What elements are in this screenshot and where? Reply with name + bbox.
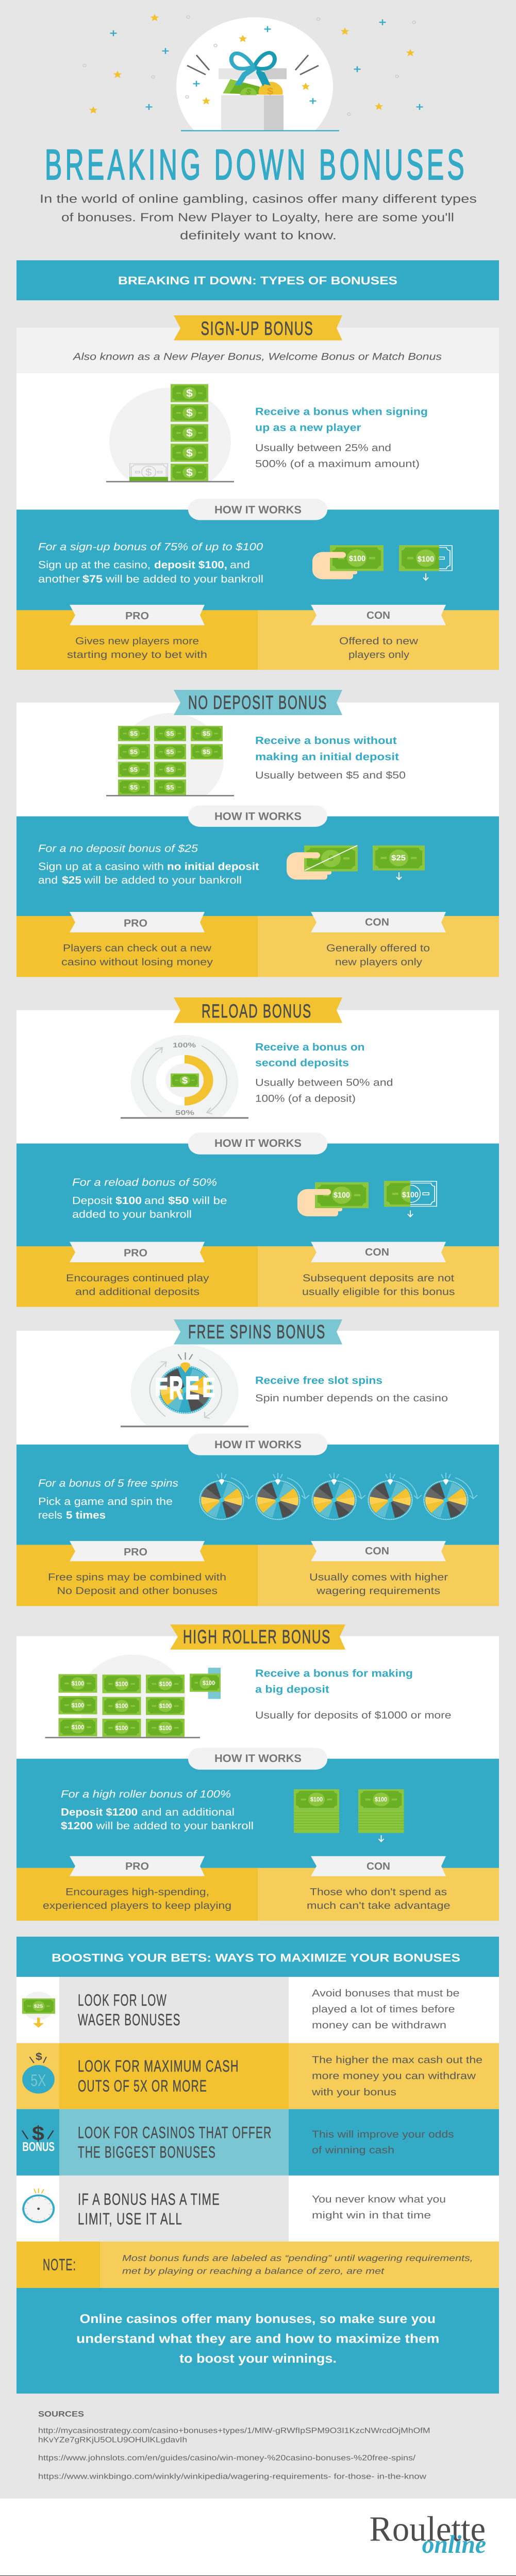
logo: roulette online: online	[422, 2531, 486, 2558]
pro: PRO	[124, 917, 147, 929]
tip row: low wager	[16, 1977, 499, 2043]
illustration: stack of bills: $	[145, 466, 152, 478]
pro: Free spins may be combined with	[48, 1571, 226, 1583]
illustration: bills going into slot: $100	[159, 1702, 172, 1709]
tip detail	[312, 2128, 454, 2156]
how it works text: another	[38, 573, 80, 585]
illustration: grid of five dollar bills: $5	[203, 748, 210, 755]
gold coin	[259, 82, 282, 97]
con: CON	[367, 609, 390, 621]
description: making an initial deposit	[255, 751, 399, 762]
how it works pill: HOW IT WORKS	[214, 1138, 302, 1149]
illustration: reload gauge: 100%	[173, 1042, 196, 1049]
description: second deposits	[255, 1057, 349, 1069]
how it works text: and	[144, 1194, 164, 1206]
pro: Encourages continued play	[66, 1273, 209, 1284]
description	[255, 1374, 448, 1403]
con: Subsequent deposits are not	[303, 1273, 454, 1284]
con: CON	[365, 1545, 389, 1557]
description: up as a new player	[255, 421, 361, 433]
pro: starting money to bet with	[67, 649, 207, 660]
pro: casino without losing money	[61, 956, 213, 968]
illustration: free spin wheel	[121, 1345, 248, 1427]
sources: https://www.winkbingo.com/winkly/winkipedia/wagering-requirements- for-those- in-the-know	[38, 2472, 427, 2481]
how it works pill: HOW IT WORKS	[214, 504, 302, 516]
icon: half bill with arrow: $100	[402, 1191, 419, 1199]
con: CON	[367, 1860, 390, 1872]
illustration: grid of five dollar bills: $5	[130, 766, 138, 773]
con: much can't take advantage	[307, 1900, 451, 1911]
tip detail: with your bonus	[311, 2086, 396, 2097]
illustration: reload gauge: $	[182, 1076, 188, 1086]
how it works text	[38, 1477, 178, 1521]
hero illustration: gift box with confetti	[83, 14, 423, 131]
con: Those who don't spend as	[310, 1886, 447, 1897]
description: Receive a bonus without	[255, 735, 397, 747]
icon: hand with bill: $100	[349, 554, 365, 563]
icon: stopwatch	[22, 2188, 55, 2223]
description: Receive a bonus for making	[255, 1667, 413, 1679]
illustration: bills going into slot: $100	[72, 1702, 84, 1709]
how it works text: will be added to your bankroll	[105, 573, 263, 585]
con: new players only	[335, 956, 422, 968]
note: met by playing or reaching a balance of zero, are met	[122, 2266, 385, 2276]
intro text: definitely want to know.	[180, 228, 337, 242]
how it works text: For a sign-up bonus of 75% of up to $100	[38, 540, 263, 552]
illustration: free spin wheel: R	[169, 1370, 183, 1405]
illustration: bills going into slot: $100	[159, 1724, 172, 1732]
how it works pill	[188, 1748, 327, 1770]
ribbon heading: reload bonus: RELOAD BONUS	[202, 1000, 312, 1022]
icon: 5X badge	[22, 2050, 55, 2094]
icon: bill sliding in with arrow	[399, 545, 453, 580]
how it works text: no initial deposit	[167, 860, 259, 872]
illustration: grid of five dollar bills: $5	[166, 766, 174, 773]
icon: 25 dollar bill with arrow: $25	[391, 854, 406, 862]
illustration: free spin wheel: E	[203, 1373, 215, 1402]
pro: PRO	[124, 1546, 147, 1557]
how it works text: For a reload bonus of 50%	[72, 1176, 217, 1188]
how it works text: and an additional	[141, 1806, 235, 1818]
illustration: stack of bills: $	[186, 407, 193, 419]
tip row: maximum cash outs: LOOK FOR MAXIMUM CASH	[78, 2057, 239, 2075]
pro: Encourages high-spending,	[65, 1886, 209, 1897]
illustration: stack of bills: $	[186, 427, 193, 438]
pro: and additional deposits	[75, 1286, 199, 1297]
cash bill in gift: $	[244, 87, 253, 97]
illustration: stack of bills: $	[186, 466, 193, 478]
tip detail: Avoid bonuses that must be	[312, 1987, 460, 1998]
description	[255, 405, 428, 469]
how it works text: $25	[62, 874, 81, 886]
pro: PRO	[124, 1247, 147, 1259]
section header: types of bonuses	[16, 260, 499, 300]
tip row: time limit	[16, 2176, 499, 2242]
icon: bonus dollar: BONUS	[22, 2140, 55, 2154]
how it works text: reels	[38, 1509, 62, 1521]
sources	[38, 2410, 430, 2481]
tip row: low wager: WAGER BONUSES	[78, 2010, 181, 2029]
tip detail: money can be withdrawn	[312, 2020, 446, 2031]
panel: reload bonus	[16, 997, 499, 1307]
pro	[48, 1541, 226, 1596]
pro: experienced players to keep playing	[43, 1900, 231, 1911]
icon: hand with bill	[297, 1182, 369, 1216]
gift box	[221, 95, 284, 130]
how it works text: $75	[82, 573, 103, 585]
con: players only	[348, 649, 409, 660]
illustration: bills going into slot	[45, 1654, 221, 1738]
how it works text: $100	[115, 1194, 142, 1206]
how it works text: Deposit $1200	[61, 1806, 138, 1818]
sources: SOURCES	[38, 2410, 84, 2418]
description: Spin number depends on the casino	[255, 1392, 448, 1403]
closing statement: to boost your winnings.	[179, 2351, 337, 2366]
closing statement: Online casinos offer many bonuses, so make sure you	[79, 2312, 436, 2326]
tip row: biggest bonuses: THE BIGGEST BONUSES	[78, 2143, 216, 2161]
how it works text	[38, 540, 263, 585]
how it works text: Sign up at the casino,	[38, 559, 151, 571]
how it works text: and	[38, 874, 58, 886]
icon: 5X badge: 5X	[30, 2071, 46, 2090]
how it works pill: HOW IT WORKS	[214, 810, 302, 823]
tip detail: You never know what you	[312, 2193, 446, 2205]
intro text: In the world of online gambling, casinos offer many different types	[40, 192, 477, 206]
tip detail: might win in that time	[312, 2209, 431, 2221]
con	[309, 1541, 448, 1596]
illustration: grid of five dollar bills: $5	[166, 784, 174, 791]
ribbon bow	[231, 53, 275, 87]
con: CON	[365, 916, 389, 928]
pro: PRO	[125, 1860, 149, 1872]
illustration: grid of five dollar bills: $5	[130, 748, 138, 755]
description: 500% (of a maximum amount)	[255, 458, 420, 469]
icon: hand with crossed-out bill	[287, 845, 358, 879]
icon: two stacks of bills: $100	[375, 1796, 387, 1803]
cash bill in gift	[223, 79, 265, 102]
illustration: stack of bills: $	[186, 447, 193, 459]
illustration: grid of five dollar bills	[106, 713, 234, 796]
subtitle: Also known as a New Player Bonus, Welcome Bonus or Match Bonus	[72, 351, 442, 362]
how it works pill	[188, 805, 327, 827]
tip detail	[312, 1987, 460, 2031]
ribbon heading: high roller bonus	[170, 1624, 345, 1650]
description: Receive a bonus when signing	[255, 405, 428, 417]
con	[307, 1856, 451, 1911]
how it works pill	[188, 1434, 327, 1455]
note	[16, 2242, 499, 2288]
how it works text	[72, 1176, 227, 1220]
how it works text: 5 times	[66, 1509, 106, 1521]
description: Receive free slot spins	[255, 1374, 382, 1386]
illustration: grid of five dollar bills: $5	[130, 730, 138, 737]
description: Usually between 25% and	[255, 442, 391, 453]
tip detail	[311, 2054, 482, 2097]
how it works text: deposit $100,	[154, 559, 227, 571]
tip detail: more money you can withdraw	[312, 2070, 476, 2081]
ribbon heading: high roller bonus: HIGH ROLLER BONUS	[183, 1626, 331, 1647]
tip detail: of winning cash	[312, 2144, 394, 2156]
how it works pill: HOW IT WORKS	[214, 1438, 302, 1451]
intro text	[40, 192, 477, 242]
how it works text: will be	[192, 1194, 227, 1206]
pro	[67, 605, 207, 660]
how it works text: Deposit	[72, 1194, 113, 1206]
ribbon heading: no deposit bonus	[174, 690, 342, 715]
illustration: bills going into slot: $100	[115, 1724, 128, 1732]
description: Usually between $5 and $50	[255, 770, 406, 781]
con: CON	[365, 1246, 389, 1258]
how it works text: For a high roller bonus of 100%	[61, 1788, 231, 1800]
closing statement: understand what they are and how to maximize them	[76, 2331, 439, 2346]
note: NOTE:	[43, 2255, 76, 2274]
logo: roulette online: Roulette	[369, 2509, 486, 2549]
panel: sign-up bonus	[16, 315, 499, 670]
sources: https://www.johnslots.com/en/guides/casino/win-money-%20casino-bonuses-%20free-spins/	[38, 2453, 415, 2462]
note: Most bonus funds are labeled as “pending” until wagering requirements,	[122, 2253, 473, 2263]
description: Receive a bonus on	[255, 1041, 365, 1053]
con	[311, 605, 446, 660]
description	[255, 1667, 452, 1721]
how it works text: Sign up at a casino with	[38, 860, 164, 872]
pro: Players can check out a new	[63, 942, 211, 954]
burst rays	[187, 55, 319, 75]
tip row: biggest bonuses	[16, 2109, 499, 2176]
illustration: bills going into slot: $100	[115, 1681, 128, 1687]
how it works text: For a bonus of 5 free spins	[38, 1477, 178, 1489]
panel: high roller bonus	[16, 1624, 499, 1921]
con: Usually comes with higher	[309, 1571, 448, 1583]
con	[302, 1242, 455, 1297]
illustration: free spin wheel: E	[185, 1370, 199, 1405]
icon: two stacks of bills: $100	[310, 1796, 323, 1803]
description	[255, 735, 406, 781]
icon: bonus dollar	[22, 2122, 55, 2154]
illustration: bills going into slot: $100	[203, 1680, 215, 1686]
pro: No Deposit and other bonuses	[57, 1585, 218, 1596]
pro	[61, 912, 213, 968]
illustration: stack of bills	[106, 384, 234, 482]
panel: no deposit bonus	[16, 690, 499, 977]
con	[311, 912, 446, 968]
icon: two stacks of bills	[294, 1789, 404, 1841]
description: Usually between 50% and	[255, 1077, 393, 1088]
description: a big deposit	[255, 1683, 329, 1695]
icon: bill sliding in with arrow: $100	[418, 555, 434, 563]
sources: http://mycasinostrategy.com/casino+bonuses+types/1/MlW-gRWfIpSPM9O3I1KzcNWrcdOjMhOfM	[38, 2426, 430, 2435]
tip row: biggest bonuses: LOOK FOR CASINOS THAT OFFER	[78, 2123, 272, 2142]
how it works text	[38, 842, 259, 886]
tip row: time limit: IF A BONUS HAS A TIME	[78, 2190, 220, 2208]
icon: hand with bill	[312, 545, 384, 579]
tip detail	[312, 2193, 446, 2221]
gift lid	[219, 68, 287, 79]
illustration: reload gauge	[121, 1035, 248, 1118]
illustration: free spin wheel: F	[155, 1374, 168, 1401]
description	[255, 1041, 393, 1104]
illustration: bills going into slot: $100	[159, 1681, 172, 1687]
sources: hKvYZe7gRKjU5OLU9OHUlKLgdavIh	[38, 2435, 187, 2444]
pro	[66, 1242, 209, 1297]
tip row: maximum cash outs	[16, 2043, 499, 2109]
ribbon heading: no deposit bonus: NO DEPOSIT BONUS	[188, 692, 327, 713]
illustration: grid of five dollar bills: $5	[166, 748, 174, 755]
tip row: time limit: LIMIT, USE IT ALL	[78, 2209, 182, 2228]
tip row: low wager: LOOK FOR LOW	[78, 1991, 167, 2009]
icon: hand with bill: $100	[334, 1191, 350, 1199]
how it works text: For a no deposit bonus of $25	[38, 842, 198, 854]
confetti stars	[83, 14, 423, 115]
ribbon heading: free spins bonus: FREE SPINS BONUS	[188, 1321, 326, 1343]
how it works pill	[188, 1132, 327, 1155]
icon: bill with down arrow: $25	[34, 2004, 43, 2009]
intro text: of bonuses. From New Player to Loyalty, here are some you'll	[61, 210, 454, 224]
how it works text: added to your bankroll	[72, 1208, 192, 1220]
section header: BOOSTING YOUR BETS: WAYS TO MAXIMIZE YOUR BONUSES	[52, 1952, 460, 1964]
tip detail: This will improve your odds	[312, 2128, 454, 2140]
illustration: bills going into slot: $100	[72, 1680, 84, 1687]
con: Offered to new	[339, 635, 418, 647]
description: 100% (of a deposit)	[255, 1093, 356, 1104]
ribbon heading: sign-up bonus	[174, 315, 342, 341]
how it works text: will be added to your bankroll	[84, 874, 242, 886]
how it works text: $1200	[61, 1820, 93, 1832]
tip detail: played a lot of times before	[312, 2003, 455, 2014]
ribbon heading: reload bonus	[174, 997, 342, 1023]
how it works text: and	[230, 559, 250, 571]
icon: 5X badge: $	[36, 2050, 42, 2062]
how it works text: will be added to your bankroll	[95, 1820, 254, 1832]
icon: bonus dollar: $	[32, 2122, 44, 2145]
icon: half bill with arrow	[384, 1181, 437, 1217]
illustration: grid of five dollar bills: $5	[203, 730, 210, 737]
illustration: bills going into slot: $100	[115, 1702, 128, 1709]
description: Usually for deposits of $1000 or more	[255, 1709, 452, 1721]
section header: types of bonuses: BREAKING IT DOWN: TYPES OF BONUSES	[118, 275, 397, 287]
con: Generally offered to	[326, 942, 430, 954]
tip detail: The higher the max cash out the	[312, 2054, 482, 2065]
section: ways to maximize your bonuses	[16, 1937, 499, 2242]
icon: 25 dollar bill with arrow	[373, 845, 425, 879]
closing statement	[16, 2288, 499, 2394]
con: wagering requirements	[316, 1585, 440, 1596]
how it works text: $50	[168, 1194, 189, 1206]
ribbon heading: free spins bonus	[174, 1319, 342, 1345]
pro: PRO	[125, 610, 149, 622]
illustration: bills going into slot: $100	[72, 1724, 84, 1731]
panel: free spins bonus	[16, 1319, 499, 1606]
tip row: maximum cash outs: OUTS OF 5X OR MORE	[78, 2076, 207, 2095]
illustration: grid of five dollar bills: $5	[130, 784, 138, 791]
how it works pill: HOW IT WORKS	[214, 1753, 302, 1765]
how it works text	[61, 1788, 254, 1832]
how it works text: Pick a game and spin the	[38, 1495, 173, 1507]
illustration: grid of five dollar bills: $5	[166, 730, 174, 737]
icon: bill with down arrow	[22, 1991, 55, 2028]
icon: hand with crossed-out bill: $	[328, 854, 334, 863]
ribbon heading: sign-up bonus: SIGN-UP BONUS	[201, 317, 313, 339]
pro	[43, 1856, 231, 1911]
section header	[16, 1937, 499, 1977]
icon: five spinning wheels	[199, 1473, 477, 1520]
gold coin: $	[267, 86, 273, 97]
pro: Gives new players more	[75, 635, 199, 647]
illustration: reload gauge: 50%	[175, 1109, 194, 1116]
con: usually eligible for this bonus	[302, 1286, 455, 1297]
illustration: stack of bills: $	[186, 387, 193, 399]
how it works pill	[188, 499, 327, 520]
